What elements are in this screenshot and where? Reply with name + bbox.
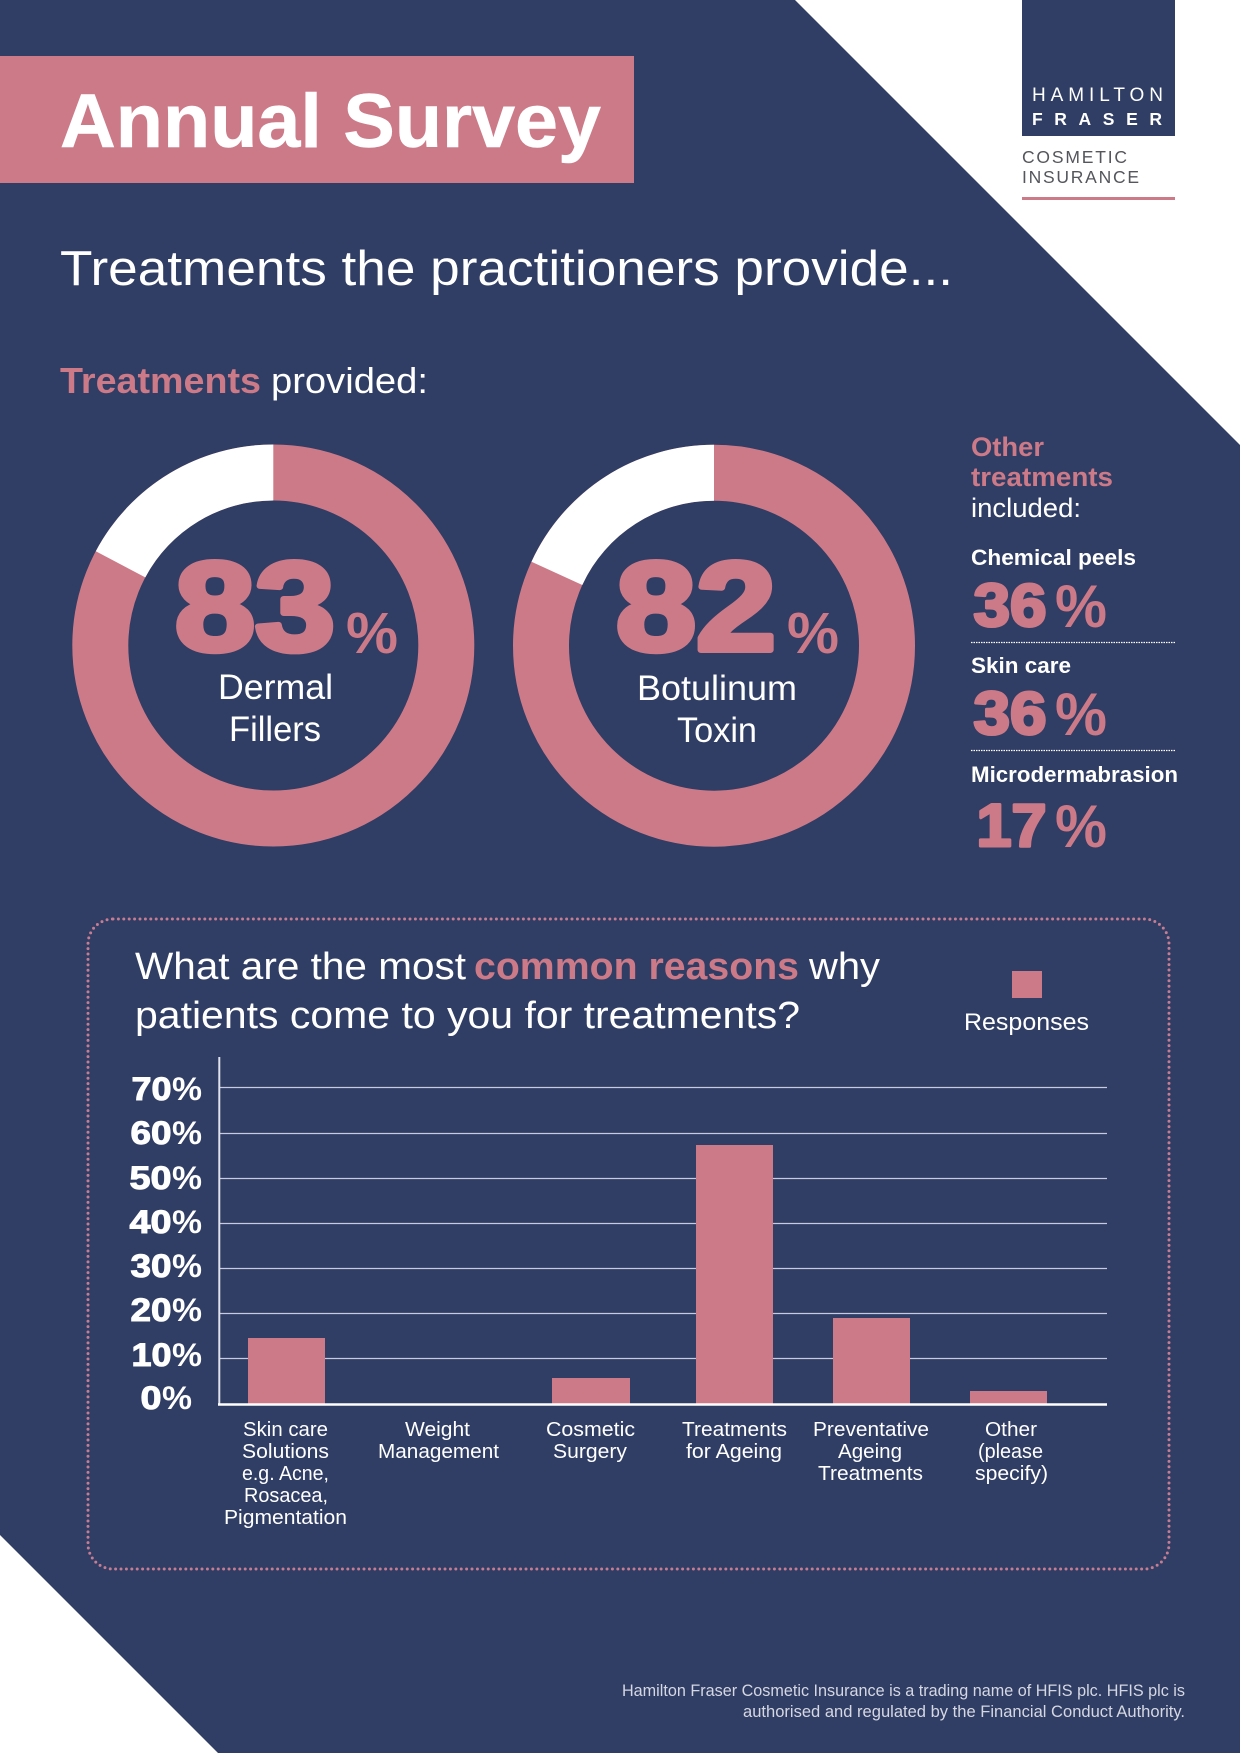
- stat: skin care 36%: [971, 653, 1107, 748]
- y axis labels: %: [172, 1071, 202, 1107]
- section heading: treatments provided: [60, 360, 428, 401]
- logo: Hamilton Fraser Cosmetic Insurance: [1022, 0, 1175, 200]
- y axis labels: 40: [130, 1204, 172, 1240]
- donut chart: dermal fillers 83%: Dermal: [218, 668, 333, 707]
- stat: microdermabrasion 17%: Microdermabrasion: [971, 762, 1178, 787]
- footer disclaimer: Hamilton Fraser Cosmetic Insurance is a trading name of HFIS plc. HFIS plc is: [622, 1681, 1185, 1700]
- title banner: [0, 56, 634, 183]
- footer disclaimer: [622, 1681, 1185, 1721]
- y axis labels: [130, 1071, 202, 1416]
- bars: [248, 1145, 1047, 1404]
- category labels: Skin care: [243, 1419, 328, 1441]
- panel: common reasons: [88, 919, 1169, 1569]
- y axis labels: %: [172, 1160, 202, 1196]
- donut chart: dermal fillers 83%: %: [346, 601, 398, 666]
- category labels: Cosmetic: [546, 1419, 635, 1441]
- category labels: Other: [985, 1419, 1037, 1441]
- panel heading: What are the most: [135, 946, 466, 988]
- donut chart: botulinum toxin 82%: Botulinum: [637, 669, 797, 708]
- category labels: Pigmentation: [224, 1507, 347, 1529]
- category labels: e.g. Acne,: [242, 1463, 329, 1485]
- heading: other treatments included: Other: [971, 432, 1044, 462]
- legend: [964, 971, 1089, 1036]
- y axis labels: %: [172, 1337, 202, 1373]
- legend: Responses: [964, 1009, 1089, 1036]
- donut chart: dermal fillers 83%: 83: [175, 536, 335, 677]
- heading: other treatments included: [971, 432, 1113, 523]
- category labels: specify): [975, 1463, 1048, 1485]
- y axis labels: %: [162, 1380, 192, 1416]
- stat: chemical peels 36%: Chemical peels: [971, 545, 1136, 570]
- stat: skin care 36%: 36: [974, 680, 1046, 747]
- category labels: [224, 1419, 1048, 1529]
- category labels: Management: [378, 1441, 499, 1463]
- stat: microdermabrasion 17%: %: [1055, 793, 1107, 860]
- category labels: Treatments: [818, 1463, 923, 1485]
- donut chart: dermal fillers 83%: Fillers: [229, 710, 321, 749]
- category labels: Weight: [405, 1419, 470, 1441]
- y axis labels: %: [172, 1292, 202, 1328]
- stat: microdermabrasion 17%: 17: [976, 792, 1046, 859]
- section heading: treatments provided: Treatments: [60, 360, 261, 401]
- y axis labels: %: [172, 1115, 202, 1151]
- stat: chemical peels 36%: %: [1055, 573, 1107, 640]
- stat: skin care 36%: %: [1055, 681, 1107, 748]
- category labels: Ageing: [838, 1441, 902, 1463]
- subtitle: Treatments the practitioners provide...: [60, 242, 953, 296]
- heading: other treatments included: treatments: [971, 462, 1113, 492]
- logo: Hamilton Fraser Cosmetic Insurance: HAMILTON: [1032, 85, 1163, 106]
- donut chart: dermal fillers 83%: [96, 444, 446, 818]
- y axis labels: 10: [132, 1337, 172, 1373]
- y axis labels: %: [172, 1248, 202, 1284]
- stat: chemical peels 36%: [971, 545, 1136, 640]
- donut chart: botulinum toxin 82%: Toxin: [677, 711, 757, 750]
- section heading: treatments provided: provided:: [271, 360, 428, 401]
- category labels: Preventative: [813, 1419, 929, 1441]
- donut chart: botulinum toxin 82%: %: [787, 601, 839, 666]
- stat: chemical peels 36%: 36: [974, 572, 1046, 639]
- footer disclaimer: authorised and regulated by the Financial Conduct Authority.: [743, 1702, 1185, 1721]
- bar chart: [130, 1057, 1107, 1529]
- category labels: Rosacea,: [244, 1485, 328, 1507]
- y axis labels: %: [172, 1204, 202, 1240]
- logo: Hamilton Fraser Cosmetic Insurance: FRASER: [1032, 109, 1162, 129]
- category labels: Surgery: [553, 1441, 627, 1463]
- panel heading: [135, 946, 880, 1037]
- panel heading: patients come to you for treatments?: [135, 995, 800, 1037]
- logo: Hamilton Fraser Cosmetic Insurance: COSMETIC: [1022, 147, 1127, 167]
- heading: other treatments included: included:: [971, 493, 1081, 523]
- y axis labels: 0: [140, 1380, 162, 1416]
- panel heading: why: [808, 946, 880, 988]
- y axis labels: 20: [130, 1292, 172, 1328]
- stat: skin care 36%: Skin care: [971, 653, 1071, 678]
- stat: microdermabrasion 17%: [971, 762, 1178, 860]
- y axis labels: 50: [130, 1160, 172, 1196]
- y axis labels: 70: [132, 1071, 172, 1107]
- y axis labels: 60: [130, 1115, 172, 1151]
- category labels: Solutions: [242, 1441, 329, 1463]
- donut chart: botulinum toxin 82%: 82: [616, 536, 776, 677]
- panel heading: common reasons: [474, 946, 799, 988]
- title banner: Annual Survey: [60, 79, 601, 164]
- y axis labels: 30: [130, 1248, 172, 1284]
- category labels: (please: [978, 1441, 1043, 1463]
- donut chart: botulinum toxin 82%: [532, 445, 887, 819]
- category labels: Treatments: [682, 1419, 787, 1441]
- logo: Hamilton Fraser Cosmetic Insurance: INSURANCE: [1022, 167, 1139, 187]
- category labels: for Ageing: [686, 1441, 782, 1463]
